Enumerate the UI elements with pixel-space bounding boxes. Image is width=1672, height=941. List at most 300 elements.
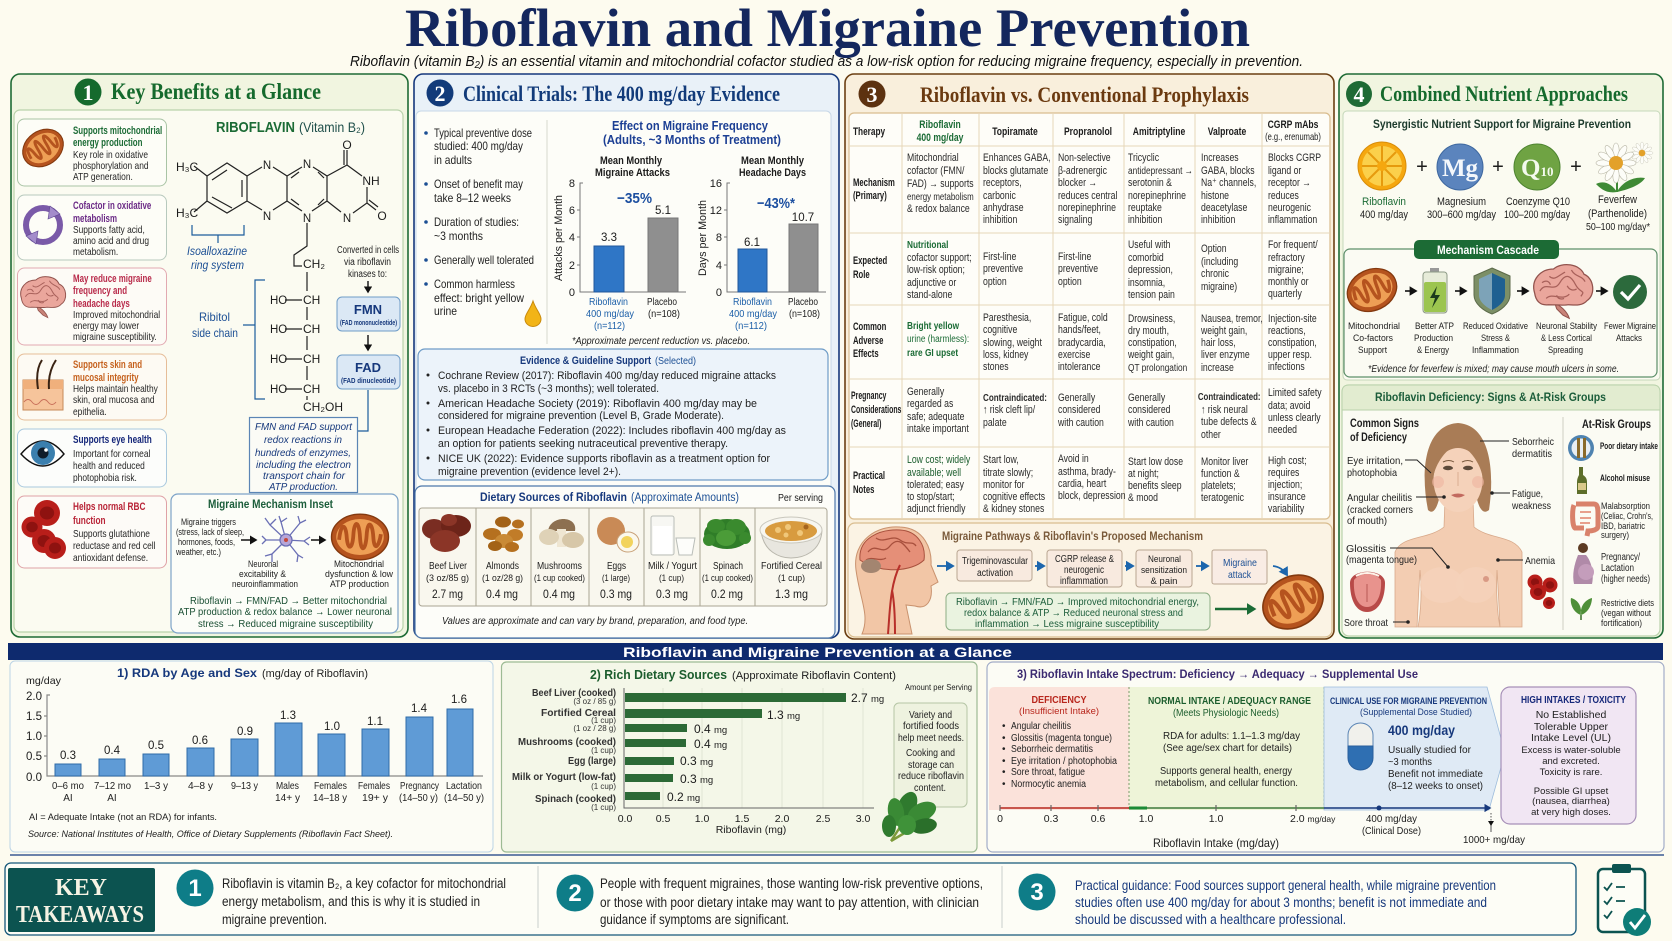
food: fortified cereal: (1 cup)	[778, 573, 805, 584]
food: eggs: (1 large)	[602, 573, 630, 584]
food: almonds: 0.4 mg	[486, 587, 518, 601]
step: CGRP release: neurogenic	[1064, 565, 1104, 576]
axis: riboflavin intake scale: (Clinical Dose)	[1362, 825, 1421, 837]
card: reduce migraine frequency: migraine susceptibility.	[73, 331, 157, 342]
zone: clinical use: 400 mg/day	[1388, 722, 1455, 738]
food: beef liver	[422, 514, 471, 601]
panel: migraine mechanism inset: neuroinflammation	[232, 579, 298, 589]
food: spinach	[702, 519, 753, 601]
note: adequate intake and source: Source: National Institutes of Health, Office of Dietary Supplements (Riboflavin Fact Sheet).	[28, 829, 393, 840]
riboflavin pathway box	[946, 593, 1210, 630]
panel: migraine mechanism inset: stress → Reduced migraine susceptibility	[198, 618, 374, 630]
step: better ATP: Production	[1414, 333, 1453, 344]
table column: riboflavin: FAD) → supports	[907, 178, 974, 190]
bar chart: dietary sources: (1 cup)	[591, 803, 616, 812]
axis: riboflavin intake scale: 1000+ mg/day	[1463, 834, 1526, 846]
bar chart: migraine attacks: 400 mg/day	[586, 309, 634, 320]
callouts: signs of deficiency: dermatitis	[1512, 448, 1552, 460]
food: almonds: (1 oz/28 g)	[482, 573, 523, 584]
zone: deficiency: Glossitis (magenta tongue)	[1011, 733, 1112, 744]
takeaway 2: guidance if symptoms are significant.	[600, 912, 789, 927]
table column: propranolol	[1057, 152, 1126, 502]
food: milk and yogurt	[648, 516, 697, 601]
panel: dietary sources of riboflavin: (Approximate Amounts)	[631, 492, 739, 504]
at risk: malabsorption: IBD, bariatric	[1601, 521, 1645, 532]
panel: migraine pathways and proposed mechanism: Migraine Pathways & Riboflavin's Proposed Mechanism	[942, 531, 1203, 543]
bar chart: headache days: (n=108)	[789, 309, 820, 320]
zone: deficiency: Sore throat, fatigue	[1011, 767, 1085, 778]
card: oxidative metabolism: Cofactor in oxidative	[73, 200, 151, 212]
table column: CGRP mAbs: ligand or	[1268, 165, 1302, 177]
chemical structure: riboflavin: H₃C	[176, 206, 199, 220]
note: variety and fortified foods: Cooking and	[906, 748, 955, 759]
panel: deficiency signs and at-risk groups: Riboflavin Deficiency: Signs & At-Risk Groups	[1375, 390, 1606, 404]
zone: deficiency: •	[1002, 756, 1006, 767]
table column: topiramate: Enhances GABA,	[983, 152, 1051, 164]
table column: topiramate: cognitive effects	[983, 491, 1045, 503]
table column: riboflavin: cofactor (FMN/	[907, 165, 965, 177]
bar chart: RDA: AI	[63, 793, 73, 804]
panel: evidence and guideline support: vs. placebo in 3 RCTs (~3 months); well tolerated.	[438, 383, 659, 395]
zone: deficiency: •	[1002, 779, 1006, 790]
bar chart: headache days: Riboflavin	[733, 297, 772, 308]
panel: migraine mechanism inset: Riboflavin → FMN/FAD → Better mitochondrial	[190, 595, 387, 607]
table column: valproate: GABA, blocks	[1201, 165, 1255, 177]
label: ribitol side chain: side chain	[192, 326, 238, 340]
note: adequate intake and source: AI = Adequate Intake (not an RDA) for infants.	[29, 812, 217, 823]
table column: valproate: teratogenic	[1201, 492, 1244, 504]
table column: CGRP mAbs: requires	[1268, 467, 1299, 479]
food: spinach: (1 cup cooked)	[702, 573, 753, 583]
heading: rich dietary sources: (Approximate Riboflavin Content)	[732, 670, 896, 682]
card: RBC function: Supports glutathione	[73, 528, 150, 539]
banner: at a glance	[8, 643, 1663, 660]
bar chart: headache days: −43%*	[757, 195, 795, 212]
table column: riboflavin: low-risk option;	[907, 264, 965, 276]
box: FMN: (FAD mononucleotide)	[340, 318, 397, 327]
table column: riboflavin: safe; adequate	[907, 411, 965, 423]
step: neuronal stability	[1534, 265, 1597, 356]
table column: amitriptyline: insomnia,	[1128, 277, 1165, 289]
zone: deficiency: DEFICIENCY	[1032, 694, 1086, 706]
table column: propranolol: option	[1058, 276, 1082, 288]
table column: topiramate: blocks glutamate	[983, 165, 1049, 177]
card: mitochondrial energy: ATP generation.	[73, 171, 133, 182]
callouts: signs of deficiency: Anemia	[1525, 555, 1555, 567]
bar chart: headache days: 10.7	[792, 212, 814, 224]
bullet list: trial facts: Generally well tolerated	[434, 253, 534, 267]
bar chart: dietary sources: Milk or Yogurt (low-fat)	[512, 771, 616, 783]
panel: migraine mechanism inset: (stress, lack of sleep,	[176, 527, 244, 537]
note: variety and fortified foods: reduce riboflavin	[898, 771, 964, 782]
callouts: signs of deficiency: weakness	[1511, 500, 1551, 512]
divider	[537, 866, 539, 928]
chemical structure: riboflavin: NH	[362, 174, 380, 188]
riboflavin pathway box: inflammation → Less migraine susceptibility	[975, 618, 1160, 630]
nutrient: magnesium: Magnesium	[1437, 196, 1486, 208]
icon: red blood cells	[1528, 574, 1558, 609]
step: trigeminovascular activation: Trigeminovascular	[962, 556, 1029, 567]
table column: topiramate: receptors,	[983, 177, 1022, 189]
box: FAD: FAD	[355, 360, 381, 375]
table column: valproate: Increases	[1201, 152, 1239, 164]
table column: CGRP mAbs: receptor →	[1268, 177, 1311, 189]
bullet list: trial facts: Duration of studies:	[434, 215, 519, 229]
bar chart: migraine attacks: 8	[569, 178, 575, 190]
table column: riboflavin: intake important	[907, 423, 969, 435]
table column: propranolol: block, depression	[1058, 490, 1126, 502]
panel: key takeaways	[5, 863, 1576, 935]
table row labels: Pregnancy	[851, 389, 887, 401]
table column: topiramate: cognitive	[983, 324, 1018, 336]
zone: clinical use: ~3 months	[1388, 756, 1432, 768]
chemical structure: riboflavin	[176, 138, 387, 414]
bar chart: dietary sources: 0.3 mg	[680, 754, 713, 768]
nutrient: riboflavin: 400 mg/day	[1360, 209, 1408, 221]
card: oxidative metabolism: metabolism.	[73, 246, 118, 257]
bar chart: migraine attacks: 6	[569, 205, 575, 217]
table header row: Propranolol	[1064, 126, 1112, 138]
bar chart: dietary sources: (1 cup)	[591, 782, 616, 791]
table column: valproate: Option	[1201, 243, 1227, 255]
note: variety and fortified foods: fortified foods	[903, 721, 959, 732]
bar chart: headache days: (n=112)	[735, 321, 767, 332]
chemical structure: riboflavin: CH	[303, 293, 320, 307]
bar chart: dietary sources: Riboflavin (mg)	[716, 824, 786, 836]
card: mitochondrial energy	[15, 119, 167, 186]
step: mitochondrial cofactors: Co-factors	[1353, 333, 1393, 344]
takeaway 2	[556, 874, 983, 927]
chemical structure: riboflavin: HO	[270, 384, 287, 396]
riboflavin pathway box: Riboflavin → FMN/FAD → Improved mitochondrial energy,	[956, 596, 1199, 608]
panel: evidence and guideline support: migraine prevention (evidence level 2+).	[438, 466, 621, 478]
zone: normal intake: NORMAL INTAKE / ADEQUACY RANGE	[1148, 696, 1311, 707]
note: FMN and FAD support redox reactions: ATP production.	[268, 481, 338, 493]
bar chart: migraine attacks: (n=112)	[594, 321, 625, 332]
bar chart: RDA: 0.4	[104, 745, 121, 757]
bar chart: migraine attacks	[553, 155, 686, 332]
bar chart: dietary sources: 0.3 mg	[680, 772, 713, 786]
card: eye health: Supports eye health	[73, 434, 152, 446]
table column: topiramate: stones	[983, 361, 1009, 373]
zone: clinical use: (Supplemental Dose Studied)	[1360, 707, 1472, 718]
bullet list: trial facts: urine	[434, 304, 457, 318]
step: neuronal sensitization: sensitization	[1141, 565, 1187, 576]
bullet list: trial facts: ~3 months	[434, 229, 483, 243]
food: mushrooms: Mushrooms	[537, 561, 582, 572]
table column: valproate: ↑ risk neural	[1201, 404, 1248, 416]
bullet list: trial facts	[424, 126, 534, 318]
riboflavin pathway box: redox balance & ATP → Reduced neuronal stress and	[964, 607, 1183, 619]
at-risk groups: At-Risk Groups	[1582, 417, 1651, 431]
card: skin and mucosal: epithelia.	[73, 406, 107, 417]
bar chart: RDA: 1.6	[451, 694, 467, 706]
table column: valproate: function &	[1201, 468, 1240, 480]
table header row	[853, 119, 1321, 144]
at risk: restrictive diets: (vegan without	[1601, 608, 1651, 619]
table column: propranolol: asthma, brady-	[1058, 466, 1116, 478]
table column: propranolol: First-line	[1058, 251, 1092, 263]
table column: topiramate	[983, 152, 1051, 515]
table column: topiramate: titrate slowly;	[983, 467, 1033, 479]
table header row: Therapy	[853, 126, 886, 138]
nutrient: coenzyme Q10: Q10	[1521, 155, 1553, 182]
table column: valproate: inhibition	[1201, 214, 1235, 226]
table column: valproate: hair loss,	[1201, 337, 1236, 349]
nutrient: coenzyme Q10: 100–200 mg/day	[1504, 209, 1570, 221]
table column: CGRP mAbs: neurogenic	[1268, 202, 1311, 214]
table column: riboflavin: rare GI upset	[907, 347, 959, 359]
panel: migraine mechanism inset: hormones, foods,	[178, 537, 235, 547]
heading: rich dietary sources	[590, 668, 972, 692]
axis: riboflavin intake scale	[997, 805, 1526, 850]
plus sign: +	[1570, 156, 1582, 178]
table column: valproate: chronic	[1201, 268, 1229, 280]
food: mushrooms: (1 cup cooked)	[534, 573, 585, 583]
heading: key benefits: 1	[82, 80, 94, 105]
food: milk and yogurt: 0.3 mg	[656, 587, 688, 601]
callouts: signs of deficiency: (cracked corners	[1347, 504, 1413, 516]
axis: riboflavin intake scale: 400 mg/day	[1366, 813, 1418, 825]
connector: FAD to note	[358, 390, 368, 431]
table column: amitriptyline: & mood	[1128, 492, 1158, 504]
takeaway 3: 3	[1030, 879, 1044, 906]
callouts: signs of deficiency: Fatigue,	[1512, 488, 1543, 500]
table column: topiramate: preventive	[983, 263, 1023, 275]
step: neuronal sensitization	[1136, 550, 1192, 587]
table column: valproate: increase	[1201, 362, 1234, 374]
table column: topiramate: monitor for	[983, 479, 1025, 491]
bullet list: trial facts: take 8–12 weeks	[434, 191, 511, 205]
bar chart: RDA: 1–3 y	[144, 781, 168, 792]
table column: propranolol: Generally	[1058, 392, 1095, 404]
note: FMN and FAD support redox reactions: transport chain for	[263, 470, 345, 482]
table column: riboflavin: & redox balance	[907, 203, 970, 215]
callouts: signs of deficiency: photophobia	[1347, 467, 1397, 479]
heading: intake spectrum: 3) Riboflavin Intake Spectrum: Deficiency → Adequacy → Supplemental Use	[1017, 667, 1418, 681]
zone: clinical use	[1324, 687, 1505, 810]
heading: prophylaxis comparison	[858, 80, 1249, 108]
plus sign: +	[1492, 156, 1504, 178]
bar chart: RDA: 1.0	[26, 731, 42, 743]
card: eye health: Important for corneal	[73, 448, 150, 459]
panel: migraine pathways and proposed mechanism	[848, 523, 1333, 640]
card: reduce migraine frequency: Improved mitochondrial	[73, 309, 160, 320]
table column: CGRP mAbs: infections	[1268, 361, 1305, 373]
bar chart: migraine attacks: Attacks per Month	[553, 195, 565, 281]
takeaway 1: energy metabolism, and this is why it is studied in	[222, 894, 480, 909]
bar chart: dietary sources: (1 oz / 28 g)	[573, 724, 616, 733]
table column: amitriptyline: comorbid	[1128, 252, 1164, 264]
table column: amitriptyline: inhibition	[1128, 214, 1162, 226]
bar chart: migraine attacks: Mean Monthly	[600, 155, 663, 167]
chart footnote: *Approximate percent reduction vs. placebo.	[572, 336, 750, 347]
table column: propranolol: with caution	[1057, 417, 1104, 429]
chemical structure: riboflavin: N	[263, 160, 271, 172]
zone: deficiency: Angular cheilitis	[1011, 721, 1071, 732]
table column: propranolol: Avoid in	[1058, 453, 1089, 465]
card: skin and mucosal: skin, oral mucosa and	[73, 394, 155, 405]
panel: evidence and guideline support	[418, 349, 828, 480]
step: reduced oxidative stress	[1463, 268, 1528, 356]
bar chart: headache days: Days per Month	[697, 200, 709, 276]
at-risk groups	[1568, 417, 1658, 629]
zone: high intakes and toxicity: Intake Level (UL)	[1531, 732, 1611, 744]
food: milk and yogurt: Milk / Yogurt	[648, 561, 697, 572]
table column: amitriptyline: at night;	[1128, 468, 1159, 480]
table header row: Riboflavin	[919, 119, 961, 131]
takeaway 1: 1	[188, 875, 202, 902]
food: eggs: Eggs	[607, 561, 626, 572]
table column: CGRP mAbs: insurance	[1268, 491, 1306, 503]
table header row: (e.g., erenumab)	[1265, 131, 1321, 142]
step: fewer migraine attacks: Fewer Migraine	[1604, 321, 1656, 332]
table column: amitriptyline: weight gain,	[1127, 349, 1174, 361]
axis: riboflavin intake scale: 0.3	[1044, 813, 1058, 825]
bar chart: RDA: (14–50 y)	[444, 793, 484, 804]
at risk: alcohol misuse	[1577, 467, 1650, 494]
table column: CGRP mAbs: migraine;	[1268, 264, 1304, 276]
note: FMN and FAD support redox reactions: hundreds of enzymes,	[255, 447, 351, 459]
table column: valproate: Contraindicated:	[1198, 391, 1261, 402]
table row labels: Adverse	[853, 335, 883, 347]
step: neuronal sensitization: & pain	[1151, 576, 1177, 587]
table column: valproate: platelets;	[1201, 480, 1236, 492]
food: fortified cereal: 1.3 mg	[775, 587, 808, 601]
table column: CGRP mAbs: quarterly	[1268, 288, 1302, 300]
bar chart: headache days: 4	[716, 260, 722, 272]
table column: valproate: other	[1201, 429, 1221, 441]
bar chart: dietary sources: 0.4 mg	[694, 737, 727, 751]
bar chart: RDA: mg/day	[26, 675, 62, 687]
table column: riboflavin: available; well	[907, 467, 961, 479]
takeaway 3: Practical guidance: Food sources support general health, while migraine prevention	[1075, 878, 1496, 893]
panel: evidence and guideline support: Evidence & Guideline Support	[520, 355, 651, 367]
zone: normal intake	[1129, 687, 1324, 810]
at risk: alcohol misuse: Alcohol misuse	[1600, 473, 1650, 484]
table column: propranolol: β-adrenergic	[1058, 165, 1107, 177]
step: fewer migraine attacks: Attacks	[1616, 333, 1642, 344]
step: CGRP release: inflammation	[1060, 576, 1108, 587]
panel: dietary sources of riboflavin	[415, 486, 835, 638]
step: mitochondrial cofactors: Support	[1358, 345, 1387, 356]
heading: rich dietary sources: 2) Rich Dietary Sources	[590, 668, 727, 682]
zone: deficiency: •	[1002, 721, 1006, 732]
box: FMN	[337, 297, 400, 331]
zone: clinical use: (8–12 weeks to onset)	[1388, 780, 1483, 792]
table column: valproate: deacetylase	[1201, 202, 1248, 214]
bar chart: migraine attacks: Placebo	[647, 297, 677, 308]
panel: riboflavin intake spectrum	[987, 662, 1664, 852]
panel: evidence and guideline support: Cochrane Review (2017): Riboflavin 400 mg/day reduced migraine attacks	[438, 370, 776, 382]
table column: amitriptyline: QT prolongation	[1128, 362, 1187, 374]
panel: dietary sources of riboflavin: Values are approximate and can vary by brand, preparation, and food type.	[442, 616, 748, 627]
table column: valproate: liver enzyme	[1201, 349, 1250, 361]
panel: migraine mechanism inset: weather, etc.)	[175, 547, 221, 557]
panel: evidence and guideline support: an option for patients seeking nutraceutical preventive therapy.	[438, 438, 728, 450]
table column: topiramate: & kidney stones	[983, 503, 1044, 515]
bar chart: RDA: 0.0	[26, 772, 42, 784]
zone: high intakes and toxicity: No Established	[1536, 709, 1606, 721]
table column: topiramate: slowing, weight	[983, 337, 1042, 349]
zone: deficiency: Seborrheic dermatitis	[1011, 744, 1093, 755]
panel 3: riboflavin vs conventional prophylaxis	[845, 74, 1334, 640]
note: variety and fortified foods	[894, 703, 967, 807]
table column: riboflavin: adjunctive or	[907, 277, 957, 289]
bar chart: dietary sources: (1 cup)	[591, 716, 616, 725]
card: oxidative metabolism: metabolism	[73, 213, 117, 225]
chemical structure: riboflavin: CH	[303, 352, 320, 366]
table column: topiramate: palate	[983, 417, 1007, 429]
bar chart: RDA: 0.9	[237, 726, 253, 738]
heading: RDA: 1) RDA by Age and Sex	[117, 666, 257, 680]
bar chart: migraine attacks: Migraine Attacks	[595, 167, 670, 179]
note: FMN and FAD support redox reactions	[250, 418, 358, 493]
table column: amitriptyline: Drowsiness,	[1128, 313, 1175, 325]
table row labels: Common	[853, 321, 886, 333]
zone: normal intake: (Meets Physiologic Needs)	[1173, 708, 1279, 719]
panel: deficiency signs and at-risk groups	[1342, 385, 1660, 636]
bar chart: RDA	[26, 675, 484, 804]
nutrient: magnesium: Mg	[1442, 155, 1479, 182]
table column: CGRP mAbs: Injection-site	[1268, 313, 1317, 325]
label: isoalloxazine ring system: Isoalloxazine	[187, 244, 247, 258]
zone: high intakes and toxicity: Excess is water-soluble	[1521, 745, 1621, 756]
takeaway 2: People with frequent migraines, those wanting low-risk preventive options,	[600, 876, 983, 891]
zone: high intakes and toxicity: (nausea, diarrhea)	[1532, 796, 1610, 807]
card: eye health: photophobia risk.	[73, 472, 137, 483]
bar chart: dietary sources: Egg (large)	[568, 755, 616, 767]
bar chart: RDA: Pregnancy	[400, 781, 439, 792]
card: RBC function: function	[73, 515, 106, 527]
table column: CGRP mAbs: injection;	[1268, 479, 1302, 491]
bar chart: headache days: 0	[716, 287, 722, 299]
food: almonds	[482, 516, 524, 601]
table column: propranolol: hands/feet,	[1058, 324, 1101, 336]
panel: migraine mechanism inset: dysfunction & low	[325, 569, 393, 579]
step: neuronal stability: & Less Cortical	[1541, 333, 1592, 344]
bar chart: headache days	[697, 155, 826, 332]
card: RBC function: antioxidant defense.	[73, 552, 148, 563]
table column: amitriptyline: depression,	[1128, 264, 1173, 276]
takeaway 3	[1018, 874, 1496, 927]
bar chart: RDA: 2.0	[26, 691, 42, 703]
heading: prophylaxis comparison: 3	[866, 82, 878, 107]
axis: riboflavin intake scale: 0.6	[1091, 813, 1105, 825]
step: fewer migraine attacks	[1604, 275, 1656, 344]
table column: propranolol: norepinephrine	[1058, 202, 1116, 214]
zone: clinical use: Benefit not immediate	[1388, 768, 1483, 780]
converted in cells note: kinases to:	[348, 269, 387, 280]
table row labels: Considerations	[851, 403, 901, 415]
food: milk and yogurt: (1 cup)	[659, 573, 684, 584]
table column: CGRP mAbs: inflammation	[1268, 214, 1317, 226]
step: trigeminovascular activation	[957, 550, 1032, 581]
icon: clipboard checklist	[1598, 864, 1651, 936]
chemical structure: riboflavin: N	[303, 159, 311, 171]
at risk: malabsorption: (Celiac, Crohn's,	[1601, 511, 1653, 522]
bar chart: RDA: 0.5	[148, 740, 164, 752]
callouts: signs of deficiency: Seborrheic	[1512, 436, 1554, 448]
table column: amitriptyline: Start low dose	[1128, 456, 1183, 468]
zone: deficiency: (Insufficient Intake)	[1019, 706, 1099, 717]
table column: CGRP mAbs: needed	[1268, 424, 1297, 436]
bar chart: headache days: 6.1	[744, 237, 760, 249]
table column: valproate: Nausea, tremor,	[1201, 313, 1263, 325]
food: eggs	[597, 517, 639, 601]
panel: evidence and guideline support: considered for migraine prevention (Level B, Grade Moderate).	[438, 410, 724, 422]
bar chart: headache days: Mean Monthly	[741, 155, 805, 167]
